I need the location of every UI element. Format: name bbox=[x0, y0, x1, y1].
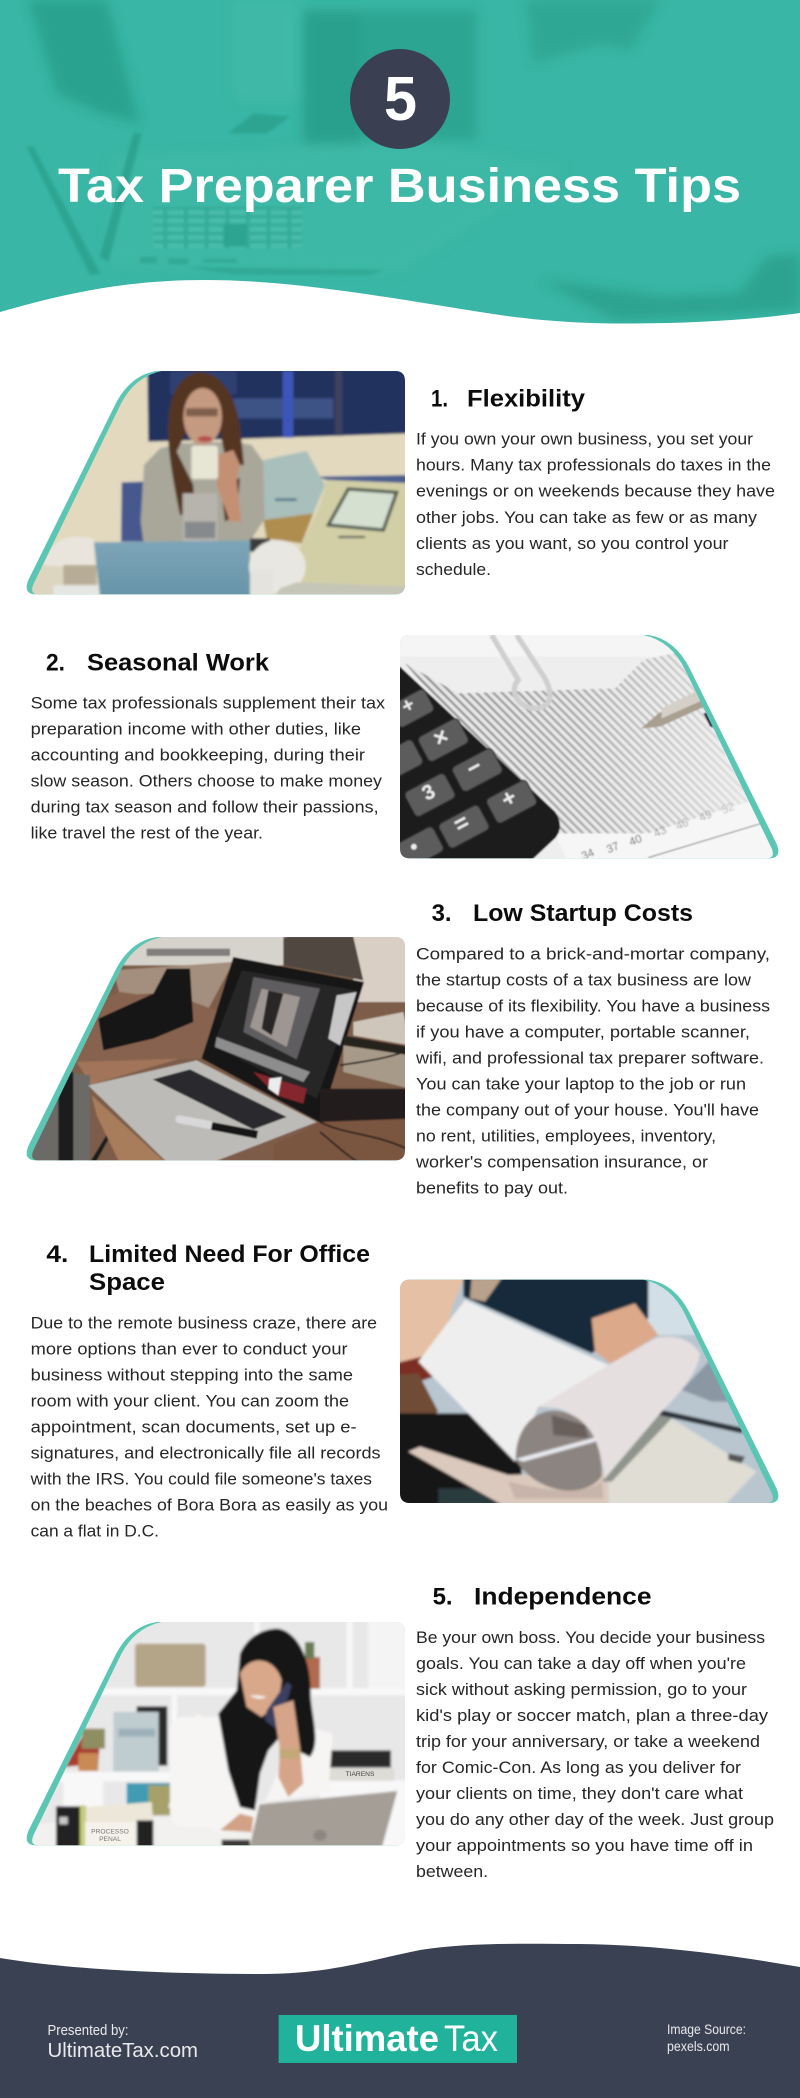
logo: UltimateTax: Tax bbox=[444, 2018, 498, 2059]
photo: calculator, chart and pen: 49 bbox=[698, 809, 714, 824]
body text: low startup costs: if you have a computer, portable scanner, bbox=[416, 1022, 750, 1042]
body text: flexibility: If you own your own business, you set your bbox=[416, 430, 753, 449]
body text: independence: for Comic-Con. As long as you deliver for bbox=[416, 1758, 741, 1777]
body text: seasonal work: slow season. Others choose to make money bbox=[31, 771, 383, 790]
photo: calculator, chart and pen: 3 bbox=[418, 780, 439, 805]
photo: calculator, chart and pen bbox=[400, 635, 778, 858]
body text: flexibility: evenings or on weekends because they have bbox=[416, 482, 775, 501]
heading: 2. Seasonal Work: Seasonal Work bbox=[87, 650, 269, 676]
heading: 2. Seasonal Work: 2. bbox=[46, 650, 65, 676]
body text: seasonal work: Some tax professionals supplement their tax bbox=[31, 693, 386, 712]
body text: low startup costs: the startup costs of a tax business are low bbox=[416, 970, 752, 990]
photo: calculator, chart and pen: 52 bbox=[720, 801, 736, 817]
body text: independence: Be your own boss. You decide your business bbox=[416, 1628, 765, 1647]
photo: calculator, chart and pen: 37 bbox=[605, 840, 621, 856]
body text: limited need for office space: room with your client. You can zoom the bbox=[31, 1392, 349, 1410]
photo: woman on phone at desk: TIARENS bbox=[346, 1771, 375, 1778]
body text: independence: sick without asking permission, go to your bbox=[416, 1680, 747, 1699]
photo: calculator, chart and pen: × bbox=[428, 722, 453, 752]
footer wave background bbox=[0, 1944, 800, 2098]
body text: seasonal work: preparation income with other duties, like bbox=[31, 719, 361, 738]
title: Tax Preparer Business Tips bbox=[58, 160, 741, 213]
photo: woman with mug and laptop bbox=[20, 365, 410, 598]
body text: independence: kid's play or soccer match, plan a three-day bbox=[416, 1706, 769, 1725]
heading: 4. Limited Need For Office Space: Space bbox=[89, 1269, 165, 1296]
footer bbox=[0, 1944, 800, 2098]
body text: flexibility: other jobs. You can take as few or as many bbox=[416, 508, 758, 527]
photo: calculator, chart and pen: 43 bbox=[652, 824, 668, 840]
presented by bbox=[48, 2023, 198, 2062]
tip 5: independence bbox=[20, 1584, 774, 1881]
number badge bbox=[350, 49, 450, 149]
heading: 5. Independence: 5. bbox=[433, 1584, 453, 1611]
heading: 3. Low Startup Costs: Low Startup Costs bbox=[473, 900, 693, 927]
body text: flexibility: clients as you want, so you control your bbox=[416, 534, 729, 553]
tip 3: low startup costs bbox=[20, 900, 770, 1198]
photo: hands turning document pages bbox=[395, 1275, 785, 1510]
photo: woman on phone at desk: PROCESSO bbox=[91, 1829, 129, 1836]
body text: low startup costs: worker's compensation insurance, or bbox=[415, 1152, 708, 1172]
tip 1: flexibility bbox=[20, 365, 775, 598]
tip 4: limited need for office space bbox=[30, 1241, 785, 1540]
body text: limited need for office space: with the IRS. You could file someone's taxes bbox=[30, 1470, 372, 1488]
heading: 1. Flexibility: 1. bbox=[431, 386, 448, 412]
body text: flexibility: schedule. bbox=[416, 560, 491, 579]
body text: limited need for office space: signatures, and electronically file all records bbox=[31, 1444, 381, 1462]
number badge: 5 bbox=[384, 65, 417, 134]
logo: UltimateTax bbox=[279, 2015, 517, 2063]
body text: independence: between. bbox=[416, 1862, 488, 1881]
header background photo bbox=[0, 0, 800, 333]
body text: independence bbox=[416, 1628, 774, 1881]
body text: low startup costs: wifi, and professional tax preparer software. bbox=[415, 1048, 764, 1068]
photo: calculator, chart and pen: 34 bbox=[580, 847, 596, 863]
body text: independence: your clients on time, they don't care what bbox=[416, 1784, 743, 1803]
presented by: UltimateTax.com bbox=[48, 2039, 198, 2062]
body text: independence: goals. You can take a day off when you're bbox=[416, 1654, 746, 1673]
image source: pexels.com bbox=[667, 2038, 730, 2054]
body text: limited need for office space: on the beaches of Bora Bora as easily as you bbox=[31, 1496, 388, 1514]
body text: limited need for office space: Due to the remote business craze, there are bbox=[31, 1314, 377, 1332]
body text: limited need for office space: business without stepping into the same bbox=[31, 1366, 353, 1384]
body text: limited need for office space: can a flat in D.C. bbox=[31, 1522, 159, 1540]
body text: flexibility bbox=[416, 430, 775, 579]
photo: woman on phone at desk: PENAL bbox=[99, 1836, 121, 1843]
logo: UltimateTax: Ultimate bbox=[295, 2018, 439, 2059]
body text: seasonal work: during tax season and follow their passions, bbox=[31, 798, 379, 816]
body text: low startup costs: benefits to pay out. bbox=[416, 1178, 568, 1198]
body text: independence: your appointments so you have time off in bbox=[416, 1836, 753, 1855]
heading: 5. Independence: Independence bbox=[474, 1584, 652, 1611]
body text: limited need for office space: appointment, scan documents, set up e- bbox=[31, 1418, 357, 1436]
heading: 4. Limited Need For Office Space: 4. bbox=[46, 1241, 68, 1268]
header banner bbox=[0, 0, 800, 345]
body text: seasonal work bbox=[31, 693, 386, 842]
image source bbox=[667, 2021, 746, 2054]
heading: 3. Low Startup Costs: 3. bbox=[432, 900, 452, 927]
white wave divider bbox=[0, 280, 800, 345]
presented by: Presented by: bbox=[48, 2023, 128, 2039]
photo: calculator, chart and pen: + bbox=[398, 693, 419, 718]
heading: 4. Limited Need For Office Space bbox=[46, 1241, 370, 1296]
body text: seasonal work: like travel the rest of the year. bbox=[31, 824, 263, 842]
body text: low startup costs: You can take your laptop to the job or run bbox=[416, 1074, 746, 1094]
body text: independence: trip for your anniversary, or take a weekend bbox=[416, 1732, 760, 1751]
photo: calculator, chart and pen: • bbox=[406, 836, 422, 859]
photo: calculator, chart and pen: 46 bbox=[674, 817, 690, 833]
photo: woman on phone at desk bbox=[20, 1617, 410, 1850]
photo: laptop and camera on desk bbox=[20, 932, 410, 1165]
body text: independence: you do any other day of the week. Just group bbox=[416, 1810, 774, 1829]
body text: seasonal work: accounting and bookkeeping, during their bbox=[31, 745, 365, 764]
body text: limited need for office space bbox=[30, 1314, 388, 1540]
image source: Image Source: bbox=[667, 2021, 746, 2037]
heading: 1. Flexibility: Flexibility bbox=[467, 386, 585, 412]
tip 2: seasonal work bbox=[31, 630, 785, 871]
photo: calculator, chart and pen: + bbox=[496, 783, 521, 813]
body text: low startup costs bbox=[415, 944, 770, 1198]
photo: calculator, chart and pen: − bbox=[462, 752, 486, 782]
body text: low startup costs: because of its flexibility. You have a business bbox=[416, 996, 770, 1016]
photo: calculator, chart and pen: = bbox=[449, 808, 473, 838]
body text: flexibility: hours. Many tax professionals do taxes in the bbox=[416, 456, 771, 475]
body text: low startup costs: Compared to a brick-and-mortar company, bbox=[416, 944, 770, 964]
body text: low startup costs: the company out of your house. You'll have bbox=[416, 1100, 759, 1120]
body text: low startup costs: no rent, utilities, employees, inventory, bbox=[416, 1126, 716, 1146]
body text: limited need for office space: more options than ever to conduct your bbox=[31, 1340, 348, 1358]
heading: 4. Limited Need For Office Space: Limited Need For Office bbox=[89, 1241, 370, 1268]
photo: calculator, chart and pen: 40 bbox=[628, 833, 644, 849]
